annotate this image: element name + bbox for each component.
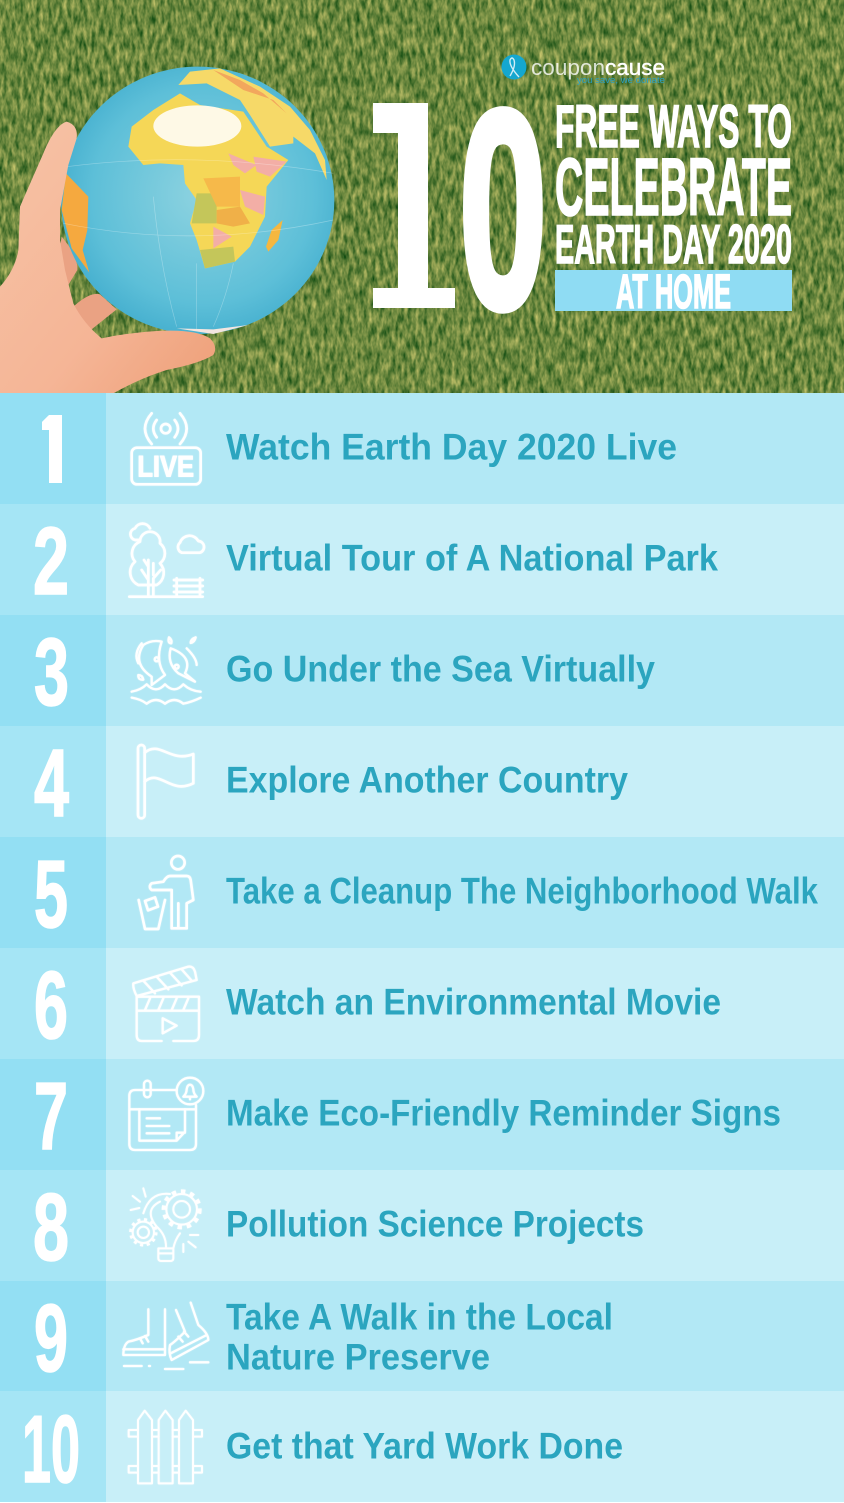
title xyxy=(373,103,792,314)
number: 5 xyxy=(34,841,68,948)
logo tagline: you save, we donate xyxy=(577,75,665,85)
icon: live broadcast: LIVE xyxy=(137,451,194,484)
number: 9 xyxy=(34,1285,68,1392)
icon: idea gears xyxy=(131,1188,200,1261)
icon: walking shoes xyxy=(123,1303,208,1369)
big 1 xyxy=(373,103,455,308)
number panel xyxy=(0,948,106,1059)
number panel xyxy=(0,1391,106,1502)
row background xyxy=(0,615,844,726)
row background xyxy=(0,504,844,615)
icon: fence xyxy=(129,1411,202,1483)
icon: live broadcast xyxy=(132,413,201,484)
row background xyxy=(0,1059,844,1170)
label: Watch an Environmental Movie xyxy=(226,982,721,1023)
row 10 xyxy=(0,1391,844,1503)
row background xyxy=(0,948,844,1059)
icon: jumping fish xyxy=(132,637,201,704)
label: Go Under the Sea Virtually xyxy=(226,649,655,690)
europe and asia xyxy=(178,68,327,180)
central africa colours xyxy=(213,153,287,248)
grass background xyxy=(0,0,844,393)
row 5 xyxy=(0,837,844,948)
globe xyxy=(61,67,334,334)
row background xyxy=(0,726,844,837)
logo wordmark light: coupon xyxy=(531,55,605,80)
logo mark xyxy=(502,54,526,80)
row background xyxy=(0,1391,844,1502)
number: 3 xyxy=(34,619,69,726)
globe sphere xyxy=(61,67,334,334)
big 1: 1 xyxy=(366,52,458,367)
row background xyxy=(0,393,844,504)
at home banner xyxy=(555,270,792,311)
number panel xyxy=(0,393,106,504)
row 3 xyxy=(0,615,844,726)
at home text: AT HOME xyxy=(616,266,731,319)
madagascar xyxy=(266,220,283,252)
number panel xyxy=(0,837,106,948)
logo wordmark bold: cause xyxy=(605,55,665,80)
number panel xyxy=(0,1059,106,1170)
number: 8 xyxy=(33,1174,69,1281)
row background xyxy=(0,837,844,948)
number panel xyxy=(0,1281,106,1391)
icon: calendar reminder xyxy=(129,1078,203,1150)
number: 1 xyxy=(32,397,70,504)
hand xyxy=(0,122,215,393)
label line 1: Take A Walk in the Local xyxy=(226,1297,613,1338)
number: 7 xyxy=(34,1063,68,1170)
south america xyxy=(62,173,89,273)
icon: person using trash bin xyxy=(139,856,193,929)
label: Watch Earth Day 2020 Live xyxy=(226,427,677,468)
label: Explore Another Country xyxy=(226,760,628,801)
number: 10 xyxy=(22,1396,80,1503)
label: Pollution Science Projects xyxy=(226,1204,644,1245)
number: 2 xyxy=(33,508,69,615)
row 2 xyxy=(0,504,844,615)
number panel xyxy=(0,615,106,726)
label line 2: Nature Preserve xyxy=(226,1337,490,1378)
icon: clapperboard xyxy=(133,967,199,1041)
sahara highlight xyxy=(153,105,241,147)
row 9 xyxy=(0,1281,844,1392)
header panel xyxy=(0,0,844,393)
icon: park xyxy=(129,524,204,597)
row 4 xyxy=(0,726,844,837)
row 7 xyxy=(0,1059,844,1170)
big 0: 0 xyxy=(459,52,547,367)
number: 4 xyxy=(34,730,69,837)
row 1 xyxy=(0,393,844,504)
number panel xyxy=(0,1170,106,1281)
label: Virtual Tour of A National Park xyxy=(226,538,718,579)
number xyxy=(42,415,62,483)
row 6 xyxy=(0,948,844,1059)
pole cap xyxy=(177,325,248,334)
number panel xyxy=(0,726,106,837)
label: Make Eco-Friendly Reminder Signs xyxy=(226,1093,781,1134)
number: 6 xyxy=(34,952,68,1059)
number panel xyxy=(0,504,106,615)
logo: couponcause xyxy=(502,54,665,85)
globe grid lines xyxy=(63,160,333,330)
label: Get that Yard Work Done xyxy=(226,1426,623,1467)
row 8 xyxy=(0,1170,844,1281)
hand holding globe xyxy=(0,67,334,393)
row background xyxy=(0,1170,844,1281)
row background xyxy=(0,1281,844,1391)
hidden fingers xyxy=(60,237,117,331)
africa xyxy=(128,93,288,268)
icon: flag xyxy=(138,745,193,818)
